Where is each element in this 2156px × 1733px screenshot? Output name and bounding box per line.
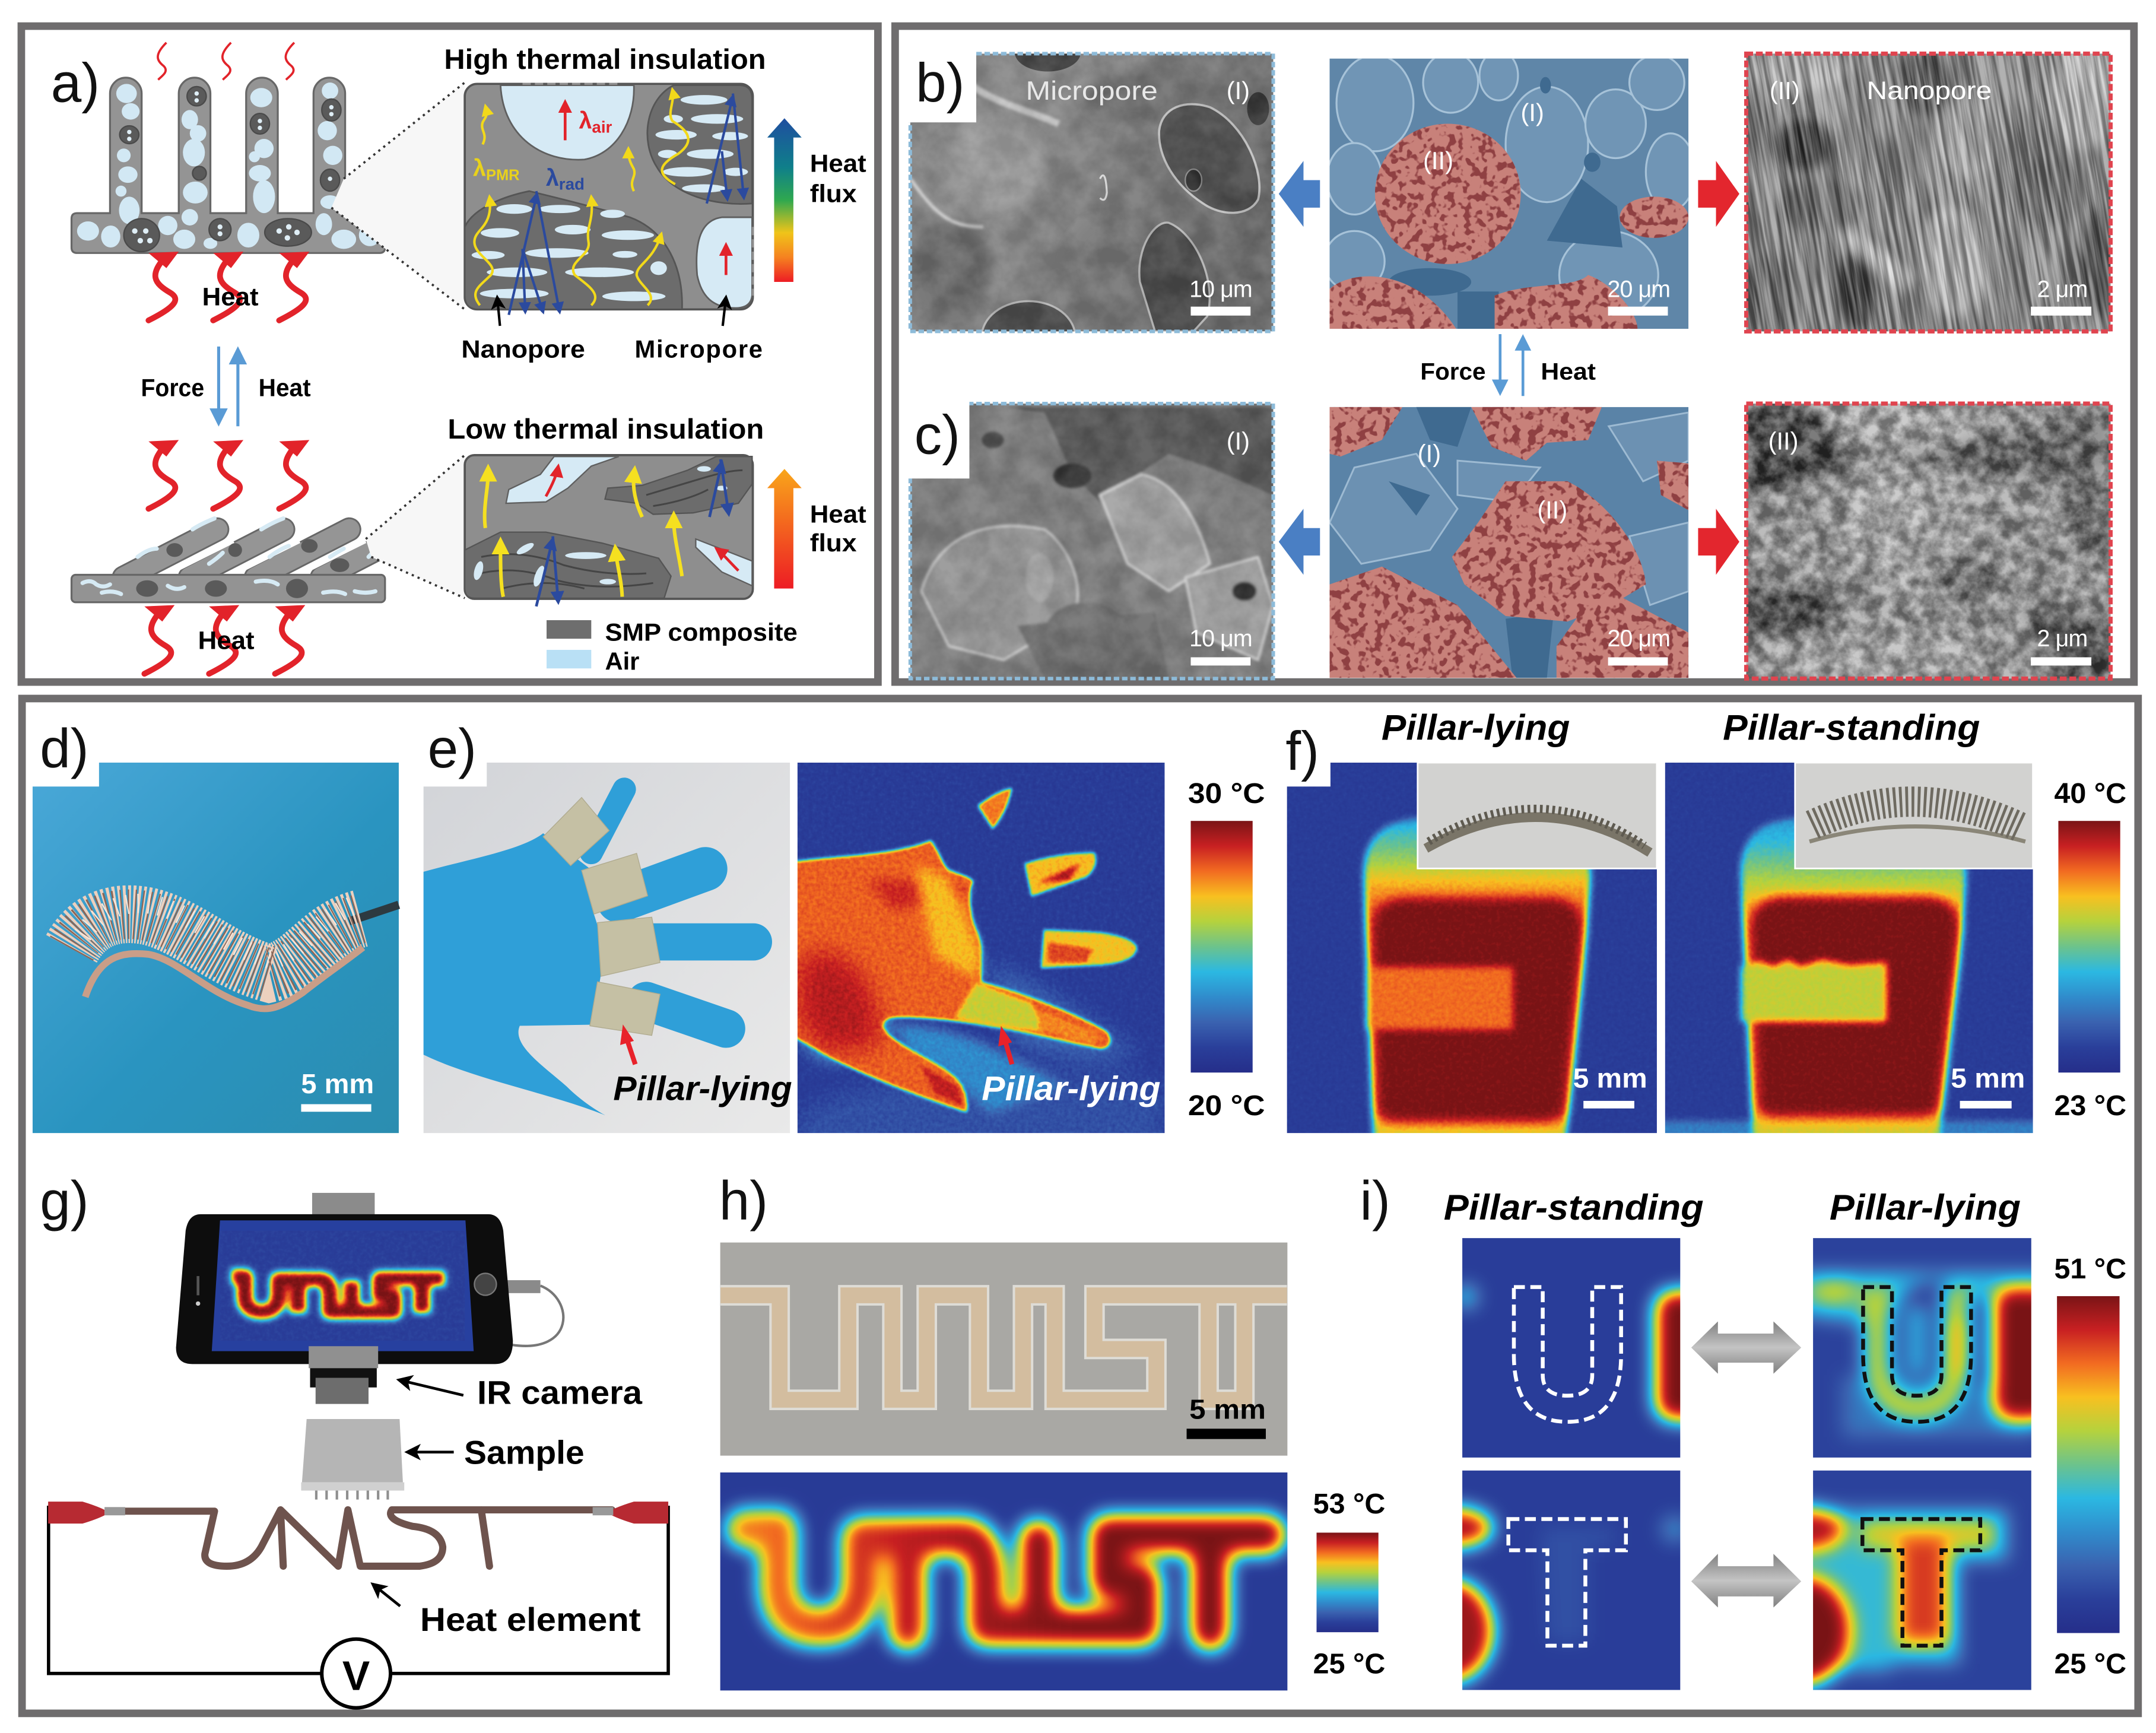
labels right c: (II) (1768, 427, 1799, 455)
center b labels and scale (1423, 99, 1671, 316)
lambda labels (473, 108, 612, 193)
panel label f: f) (1285, 720, 1319, 782)
legend: Air (605, 647, 639, 675)
panel g: IR camera setup (40, 1170, 668, 1708)
labels left c: 10 μm (1189, 626, 1253, 652)
red nanoporous region II (1329, 124, 1688, 330)
red arrows (546, 466, 738, 571)
panel label g: g) (40, 1170, 89, 1231)
label notch b (907, 49, 976, 122)
colorbar f: 40 °C (2055, 777, 2126, 810)
colorbar e: 30 °C (1188, 777, 1265, 810)
dashed border b right (1747, 53, 2110, 331)
panel e: glove photo (421, 718, 792, 1133)
pillar array (72, 903, 363, 1009)
alligator clips (48, 1502, 668, 1523)
gray reversible arrow bottom (1691, 1554, 1801, 1607)
notch d (27, 759, 99, 786)
lambda labels: PMR (486, 167, 520, 184)
SEM c center (1329, 407, 1689, 678)
pillar lying label: Pillar-lying (613, 1070, 792, 1108)
center b labels and scale: (I) (1521, 99, 1544, 126)
heat flux arrow high: Heat (810, 150, 866, 177)
title low thermal insulation: Low thermal insulation (447, 414, 764, 445)
column titles (1444, 1187, 2021, 1227)
scale bar h (1187, 1394, 1266, 1439)
heat element label (373, 1584, 641, 1638)
lambda labels: rad (559, 175, 585, 193)
title pillar lying: Pillar-lying (1382, 707, 1570, 747)
column titles: Pillar-standing (1444, 1187, 1704, 1227)
yellow arrows (485, 474, 682, 597)
circuit wires (49, 1506, 668, 1674)
heat element label: Heat element (420, 1601, 641, 1638)
nanopore and micropore callouts: Micropore (635, 335, 763, 363)
collapsed nanopore blocks (605, 456, 752, 515)
center c labels: 20 μm (1608, 626, 1671, 652)
panel d: pillar sample photo (27, 718, 399, 1133)
center b labels and scale: 20 μm (1608, 276, 1671, 302)
inset photo f right (1795, 763, 2033, 868)
labels right b: (II) (1770, 77, 1800, 104)
red air conduction arrows (565, 101, 726, 275)
inset: low thermal insulation collapsed structure (465, 455, 753, 607)
panel label e: e) (428, 718, 477, 779)
micropore air right (697, 217, 752, 308)
scale bar d (301, 1068, 374, 1112)
voltmeter (322, 1639, 390, 1708)
panel label b: b) (916, 52, 964, 113)
colorbar i: 25 °C (2055, 1648, 2126, 1680)
center b labels and scale: (II) (1423, 147, 1453, 174)
thermal lying T (1757, 1430, 2076, 1732)
panel label i: i) (1360, 1170, 1390, 1231)
panel i: U and T letter thermal contrast (1360, 1170, 2126, 1732)
lower panel frame (22, 699, 2138, 1713)
column titles: Pillar-lying (1830, 1187, 2021, 1227)
thermal standing U (1416, 1196, 1732, 1499)
zoom dotted guide lines (331, 82, 465, 598)
panel h: UNIST heater (674, 1170, 1385, 1732)
region label I: (I) (1227, 77, 1250, 104)
colorbar f: 23 °C (2055, 1090, 2126, 1122)
panel e: thermal image of hand (770, 736, 1196, 1162)
SEM b left: micropore (910, 53, 1274, 331)
labels right b: 2 μm (2037, 276, 2088, 302)
panel label h: h) (719, 1170, 768, 1231)
lambda labels: λ (473, 155, 486, 182)
blue and red direction arrows c (1279, 509, 1739, 575)
dashed air boundary (522, 84, 753, 296)
nanopore and micropore callouts (461, 297, 763, 363)
labels right b (1770, 77, 2091, 316)
sample label: Sample (464, 1434, 585, 1471)
icon: heat squiggles below upper structure (148, 252, 309, 320)
red arrow e right (998, 1026, 1012, 1064)
icon: heat squiggles above lying structure (148, 440, 309, 509)
thermal image f right (1665, 763, 2033, 1134)
thermal standing T (1406, 1430, 1732, 1732)
lambda labels: λ (579, 108, 592, 134)
title high thermal insulation: High thermal insulation (444, 44, 766, 75)
center c labels (1418, 439, 1671, 665)
force heat arrows center: Heat (1541, 358, 1596, 385)
heater photo (720, 1243, 1287, 1456)
blue and red direction arrows b (1279, 161, 1739, 227)
flattened air region right (696, 539, 752, 586)
dashed border c right (1747, 404, 2110, 678)
legend (547, 618, 798, 675)
labels right b: Nanopore (1866, 77, 1992, 105)
upper pillar structure (72, 78, 385, 253)
heater thermal image (720, 1472, 1288, 1690)
labels right c (1768, 427, 2091, 665)
colorbar f (2055, 777, 2126, 1122)
dashed border b left (910, 53, 1274, 331)
labels left c: (I) (1227, 427, 1250, 455)
panel b and c: SEM micrographs (895, 0, 2156, 682)
heat label bottom: Heat (198, 627, 255, 655)
scale bar f left (1573, 1063, 1647, 1109)
lying pillar structure (72, 518, 415, 602)
thermal lying U (1774, 1196, 2076, 1499)
title pillar standing: Pillar-standing (1723, 707, 1980, 747)
IR camera label (399, 1375, 643, 1411)
micropore air top (500, 85, 634, 160)
force and heat reversible arrows: Heat (259, 373, 311, 401)
nanoporous block upper right (647, 85, 752, 204)
force and heat reversible arrows: Force (141, 373, 204, 401)
top clamp (312, 1193, 374, 1215)
panel label c: c) (915, 404, 960, 466)
scale bar d: 5 mm (301, 1068, 374, 1099)
colorbar i: 51 °C (2055, 1253, 2126, 1285)
nanopore and micropore callouts: Nanopore (461, 335, 585, 363)
lambda labels: air (592, 118, 612, 137)
force heat arrows center: Force (1420, 358, 1485, 385)
blue arrows (536, 459, 729, 607)
yellow conduction paths (474, 90, 688, 305)
colorbar e: 20 °C (1188, 1090, 1265, 1122)
dashed border c left (910, 404, 1274, 678)
micropore label: Micropore (1025, 77, 1158, 106)
blue radiation paths (509, 94, 744, 315)
panel label d: d) (40, 718, 89, 779)
labels right c: 2 μm (2037, 626, 2088, 652)
scale bar f right (1951, 1063, 2025, 1109)
scale bar 10 um: 10 μm (1189, 276, 1253, 302)
phone thermal UNIST image (220, 1231, 465, 1341)
legend: SMP composite (605, 618, 798, 646)
thermal image f left (1287, 763, 1657, 1134)
inset photo f left (1418, 763, 1657, 868)
panel label a: a) (51, 52, 100, 113)
colorbar i (2055, 1253, 2126, 1680)
UNIST heating element (125, 1510, 612, 1566)
IR camera label: IR camera (477, 1375, 643, 1411)
colorbar h: 25 °C (1313, 1648, 1385, 1680)
force heat arrows center (1420, 334, 1596, 396)
scale bar h: 5 mm (1189, 1394, 1266, 1425)
beige pillar bands (543, 798, 660, 1036)
colorbar e (1188, 777, 1265, 1122)
inset: high thermal insulation pore structure (465, 84, 753, 315)
scale bar f right: 5 mm (1951, 1063, 2025, 1094)
notch e (421, 759, 487, 786)
panel f: thermal pillar-standing (1643, 707, 2056, 1162)
heat flux arrow high (767, 118, 866, 282)
center c labels: (I) (1418, 439, 1441, 467)
icon: heat squiggles below lying structure (144, 605, 305, 674)
panel a: thermal insulation schematic (21, 26, 878, 682)
scale bar f left: 5 mm (1573, 1063, 1647, 1094)
label notch c (907, 400, 969, 478)
icon: top small heat squiggles (158, 43, 294, 80)
lambda labels: λ (546, 165, 559, 191)
colorbar h: 53 °C (1313, 1488, 1385, 1520)
cable (512, 1286, 563, 1346)
bottom clamp and IR camera body (309, 1346, 378, 1404)
pillar lying white label: Pillar-lying (982, 1070, 1161, 1108)
blue glove (424, 789, 754, 1115)
notch f (1284, 759, 1331, 786)
heat label top: Heat (202, 283, 259, 311)
SEM b center: false-colored cross-section (1329, 58, 1689, 329)
panel f: thermal pillar-lying (1265, 707, 1678, 1162)
SEM c left (910, 404, 1274, 679)
heat flux arrow low (767, 469, 866, 589)
tweezers (350, 905, 399, 921)
heat flux arrow low: Heat (810, 500, 866, 528)
phone (176, 1214, 513, 1364)
force and heat reversible arrows (141, 347, 311, 426)
heat flux arrow high: flux (810, 180, 856, 208)
colorbar h (1313, 1488, 1385, 1680)
nanoporous block lower left (465, 191, 682, 309)
gray reversible arrow top (1691, 1322, 1801, 1374)
flattened air region top (506, 456, 619, 503)
scale bar 10 um (1189, 276, 1253, 316)
heat flux arrow low: flux (810, 529, 856, 557)
sample block (301, 1419, 404, 1500)
SEM c right (1746, 404, 2110, 679)
labels left c (1189, 427, 1253, 665)
red arrow e left (620, 1024, 635, 1064)
voltmeter: V (342, 1652, 370, 1699)
center c labels: (II) (1537, 496, 1567, 523)
SEM b right: nanopore (1746, 53, 2110, 331)
